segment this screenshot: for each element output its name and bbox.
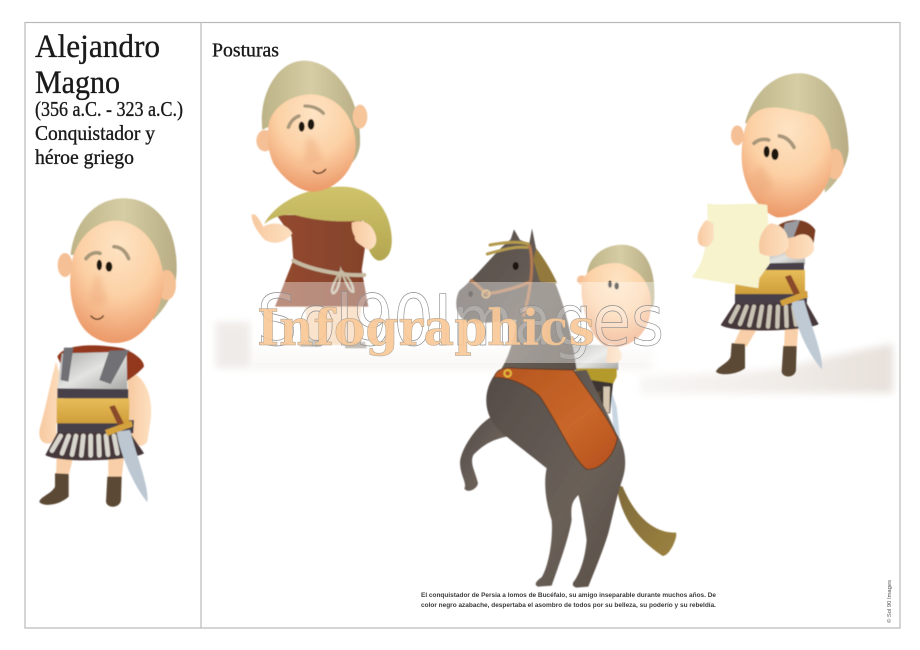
- subtitle: [35, 121, 155, 169]
- nose: [753, 167, 773, 197]
- title: name: Alejandro: [35, 29, 160, 65]
- shoulder and sleeve: [777, 220, 815, 257]
- right arm: [127, 370, 151, 446]
- caption: color negro azabache, despertaba el asombro de todos por su belleza, su poderío y su rebeldía.: [421, 602, 716, 609]
- shoulder straps: [61, 348, 129, 384]
- sword: [105, 405, 148, 502]
- legs: [56, 457, 124, 478]
- skirt: [45, 433, 144, 460]
- near ear: [731, 125, 744, 145]
- left ear: [256, 130, 274, 151]
- title: name: [35, 29, 160, 101]
- shadow under reading figure: [640, 344, 893, 394]
- eyebrows: [754, 136, 794, 147]
- caption: El conquistador de Persia a lomos de Bucéfalo, su amigo inseparable durante muchos años. De: [421, 592, 717, 599]
- skirt pleats: [52, 436, 127, 455]
- breastplate: [57, 352, 127, 390]
- far ear: [826, 149, 844, 179]
- mouth: [313, 169, 326, 173]
- horse eye: [513, 262, 519, 270]
- nose: [304, 138, 323, 164]
- bridle: [470, 245, 532, 317]
- sword: [780, 275, 822, 369]
- hair: [745, 73, 849, 193]
- arm: [780, 234, 814, 259]
- left hand: [698, 220, 714, 247]
- mouth: [91, 316, 103, 319]
- face: [70, 221, 163, 343]
- strap: [780, 220, 800, 247]
- title: name: Magno: [35, 65, 120, 101]
- caption: [421, 592, 717, 609]
- figure: Alexander riding Bucephalus: [456, 228, 676, 588]
- right hand: [759, 223, 789, 256]
- mane: [533, 248, 557, 283]
- gold belt: [735, 270, 805, 294]
- breastplate: [763, 250, 805, 265]
- hair: [262, 61, 360, 163]
- hand right: [352, 221, 376, 249]
- horse tail: [617, 485, 676, 556]
- tunic: [275, 215, 368, 307]
- rider far arm: [606, 343, 622, 363]
- rider lower body: [573, 345, 620, 438]
- watermark pale band: [252, 282, 665, 363]
- nose: [90, 277, 107, 306]
- eyes: [299, 119, 314, 132]
- eyebrows: [288, 106, 323, 127]
- legs: [733, 327, 798, 349]
- subtitle: Conquistador y: [35, 121, 155, 145]
- watermark outline text: Sol90Images: [257, 280, 664, 362]
- dark bands: [735, 263, 807, 306]
- hair: [71, 198, 177, 320]
- dates: (356 a.C. - 323 a.C.): [35, 97, 183, 121]
- shadow under cloaked figure: [216, 322, 652, 370]
- near ear: [58, 253, 72, 277]
- hand open: [252, 214, 292, 243]
- face: [742, 107, 832, 217]
- scroll: [692, 203, 770, 288]
- gold belt: [57, 398, 129, 423]
- dark bands: [57, 388, 134, 434]
- legs and sandals: [305, 305, 362, 345]
- saddle cloth: [494, 368, 617, 469]
- boots: [39, 473, 122, 507]
- eyebrows: [86, 247, 129, 259]
- tunic sleeves: [57, 345, 144, 383]
- nostril: [468, 291, 473, 297]
- watermark orange text: Infographics: [257, 298, 595, 357]
- watermark: [252, 280, 665, 363]
- cape: [264, 187, 392, 261]
- face: [268, 94, 356, 192]
- horse front leg: [460, 417, 507, 491]
- pleats: [731, 307, 806, 327]
- heading: Posturas: Posturas: [212, 40, 279, 62]
- figure: Alexander reading a scroll: [692, 73, 849, 376]
- figure: Alexander with cape: [252, 61, 392, 348]
- rider hair: [587, 245, 654, 308]
- rope belt: [293, 261, 364, 293]
- subtitle: héroe griego: [35, 145, 134, 169]
- left arm: [39, 362, 63, 444]
- rider eyes: [608, 281, 619, 290]
- eyes: [764, 146, 779, 160]
- rider face: [582, 263, 651, 347]
- title block: [35, 29, 183, 169]
- horse neck and head: [456, 228, 577, 378]
- horse body and hind legs: [486, 370, 625, 588]
- credit: © Sol 90 Images: [886, 580, 893, 623]
- right ear: [353, 105, 367, 129]
- saddle ring: [504, 370, 511, 377]
- boots: [716, 343, 797, 376]
- far ear: [157, 270, 176, 300]
- rider ear: [577, 275, 586, 285]
- eyes: [97, 260, 112, 272]
- skirt: [721, 303, 819, 330]
- figure: Alexander in armour, left column: [39, 198, 177, 507]
